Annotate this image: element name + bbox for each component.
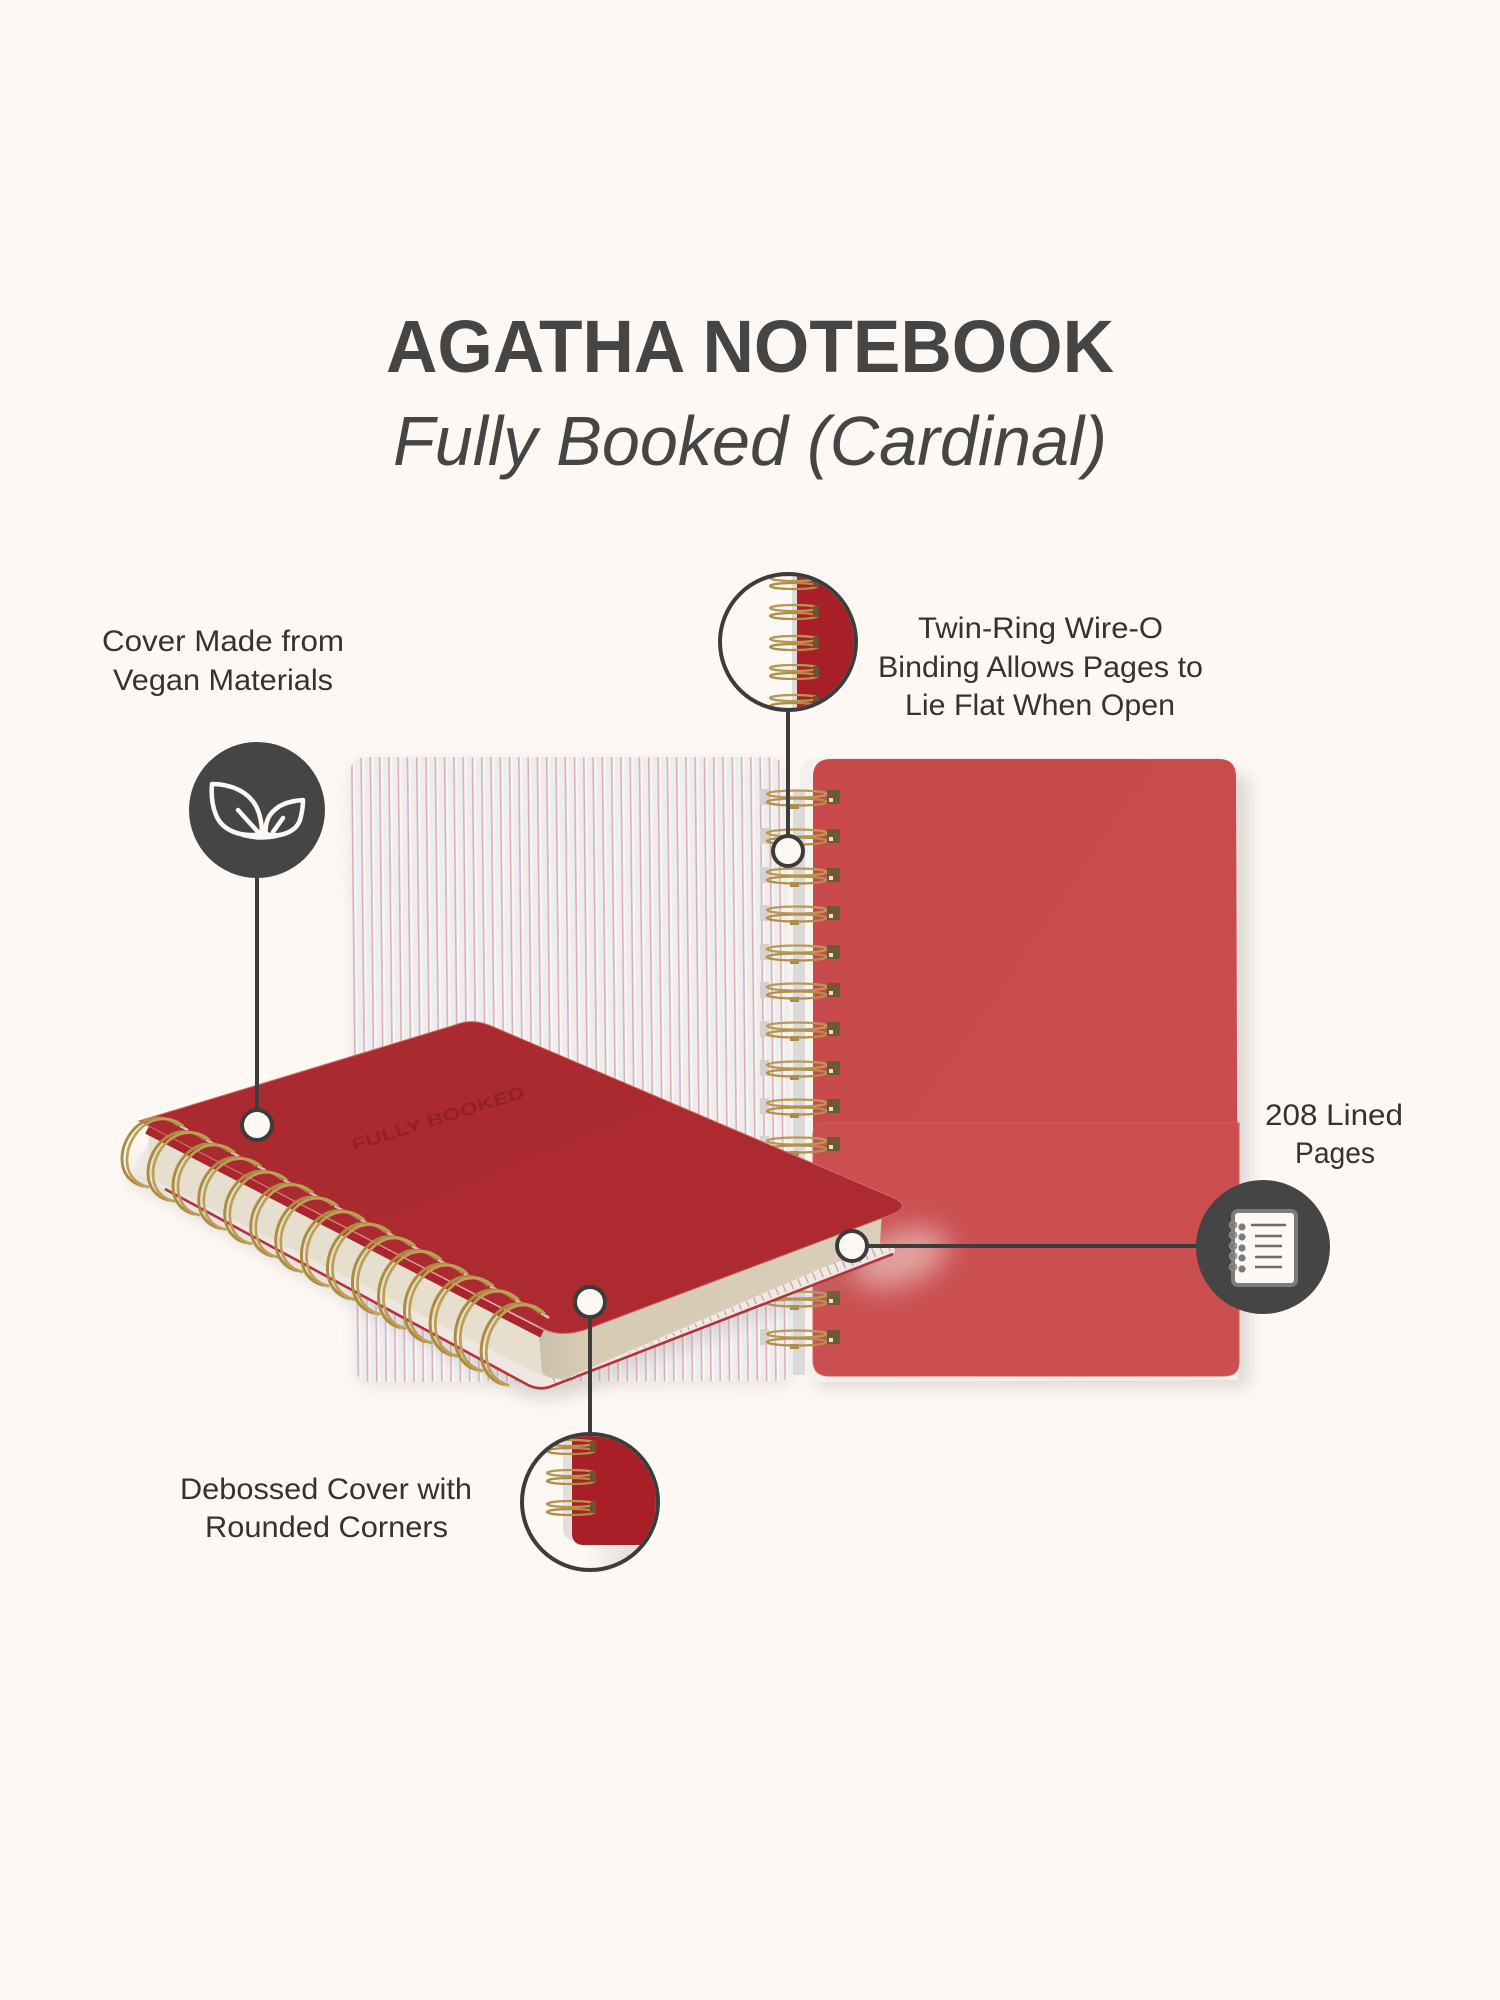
connector line [588,1317,592,1436]
label [180,1473,472,1544]
label: Lie Flat When Open [905,689,1175,722]
wire-o rings on open notebook [760,789,840,1349]
marker dot [773,836,803,866]
closed notebook [122,1022,902,1400]
connector line [255,870,259,1110]
inside cover [813,759,1238,1376]
label: Cover Made from [102,625,344,658]
label: 208 Lined [1265,1099,1403,1132]
label: Pages [1295,1137,1375,1170]
magnified corner circle [522,1430,665,1570]
label [878,612,1203,722]
label: Rounded Corners [205,1511,448,1544]
connector line [786,710,790,836]
icon: leaf badge [189,742,325,878]
magnified binding circle [720,570,867,710]
connector line [867,1244,1200,1248]
inside pocket [813,1123,1239,1376]
marker dot [575,1287,605,1317]
marker dot [242,1110,272,1140]
label [102,625,344,697]
callout: binding [720,570,1203,866]
label: Twin-Ring Wire-O [918,612,1163,645]
callout: debossed cover [180,1287,665,1570]
title: AGATHA NOTEBOOK [386,305,1114,388]
notebook shadow [125,1150,900,1400]
lined inner page [545,1243,893,1384]
subtitle: Fully Booked (Cardinal) [393,402,1107,480]
spine edge [147,1130,542,1334]
front cover [139,1022,902,1334]
back cover page [134,1140,895,1388]
marker dot [837,1231,867,1261]
label: Vegan Materials [113,664,333,697]
callout: lined pages [837,1099,1403,1314]
back cover red edge [165,1189,893,1388]
open notebook: left lined page [350,757,793,1388]
callout: vegan materials [102,625,344,1140]
label [1265,1099,1403,1170]
icon: notebook badge [1196,1180,1330,1314]
page block front [538,1213,882,1379]
page block side [148,1128,545,1377]
glow on page near closed notebook [844,1216,956,1300]
label: Binding Allows Pages to [878,651,1203,684]
label: Debossed Cover with [180,1473,472,1506]
open notebook: right page with cover [793,757,1249,1387]
debossed text: FULLY BOOKED [350,1083,527,1155]
spiral rings [122,1118,549,1385]
